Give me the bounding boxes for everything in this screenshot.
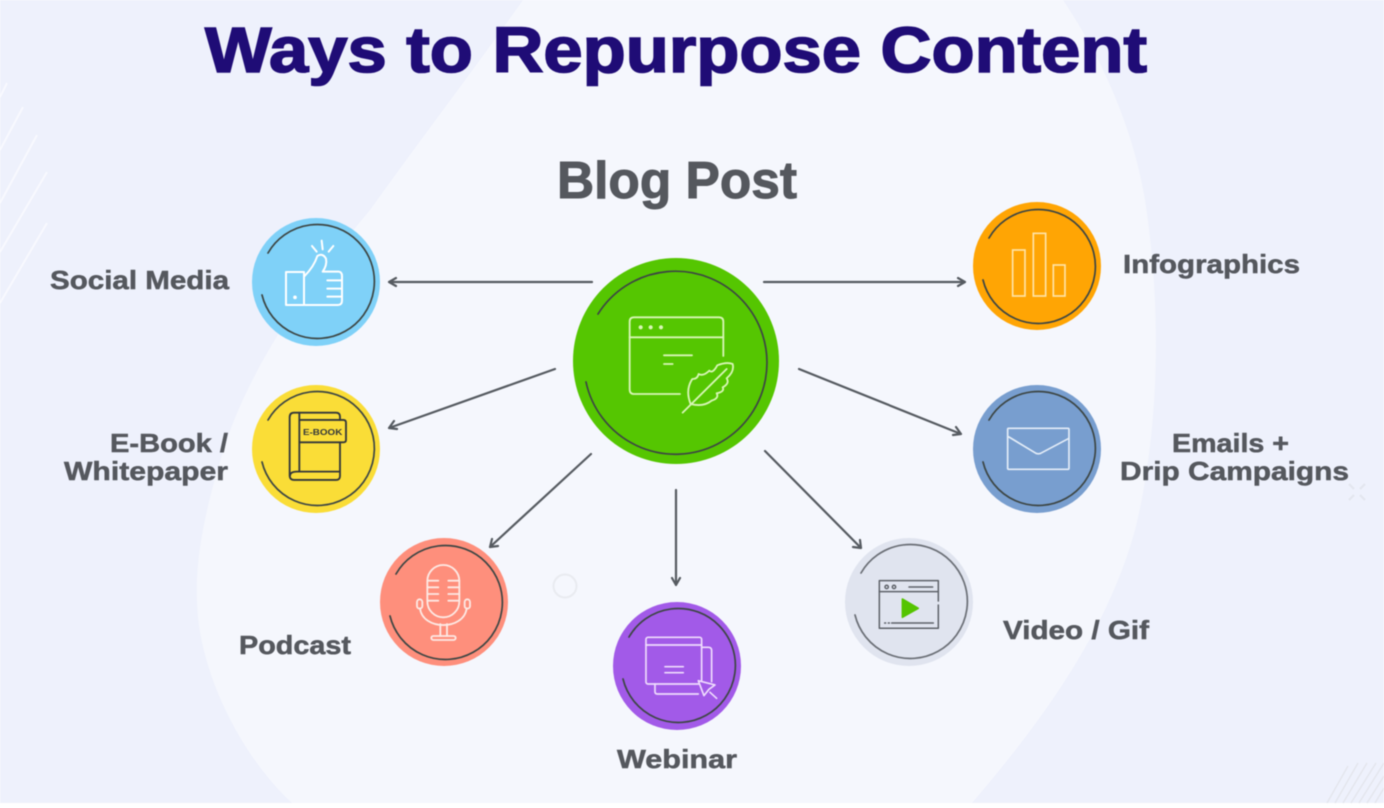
arrow: to Webinar [672,490,680,585]
background blob [197,0,1156,803]
label: Webinar: Webinar [617,744,737,774]
title: Ways to Repurpose Content [205,14,1147,86]
icon: video window with play button [879,581,938,628]
icon: microphone [417,565,470,640]
arrow: to Podcast [490,454,591,547]
arrow: to E-Book [389,369,555,429]
node: Webinar circle [613,602,741,730]
icon: webinar windows with cursor [646,637,717,698]
icon: bar chart [1013,233,1065,296]
label: Emails + Drip Campaigns: Emails + [1172,428,1289,458]
label: Infographics: Infographics [1123,249,1300,279]
heading: Blog Post: Blog Post [557,152,797,210]
label: Social Media: Social Media [50,265,230,295]
label: Video / Gif: Video / Gif [1003,615,1149,645]
label: E-Book / Whitepaper: Whitepaper [64,456,228,486]
label: Podcast: Podcast [239,630,351,660]
label: E-Book / Whitepaper: E-Book / [110,428,228,458]
arrow: to Emails [799,369,961,435]
icon: browser window with leaf [630,317,733,413]
node: Video circle [845,538,973,666]
node: Social Media circle [252,218,380,346]
icon: thumbs up [286,241,342,305]
arrow: to Social Media [389,278,592,286]
label: Emails + Drip Campaigns [1120,428,1349,486]
label: Emails + Drip Campaigns: Drip Campaigns [1120,456,1349,486]
node: E-Book circle [252,385,380,513]
arrow: to Video [765,451,861,548]
node: Podcast circle [380,538,508,666]
icon: envelope [1008,428,1069,469]
label: E-Book / Whitepaper [64,428,228,486]
icon: book: E-BOOK [303,428,343,437]
hub: Blog Post circle [573,258,779,464]
node: Infographics circle [973,202,1101,330]
node: Emails circle [973,385,1101,513]
arrow: to Infographics [764,278,965,286]
